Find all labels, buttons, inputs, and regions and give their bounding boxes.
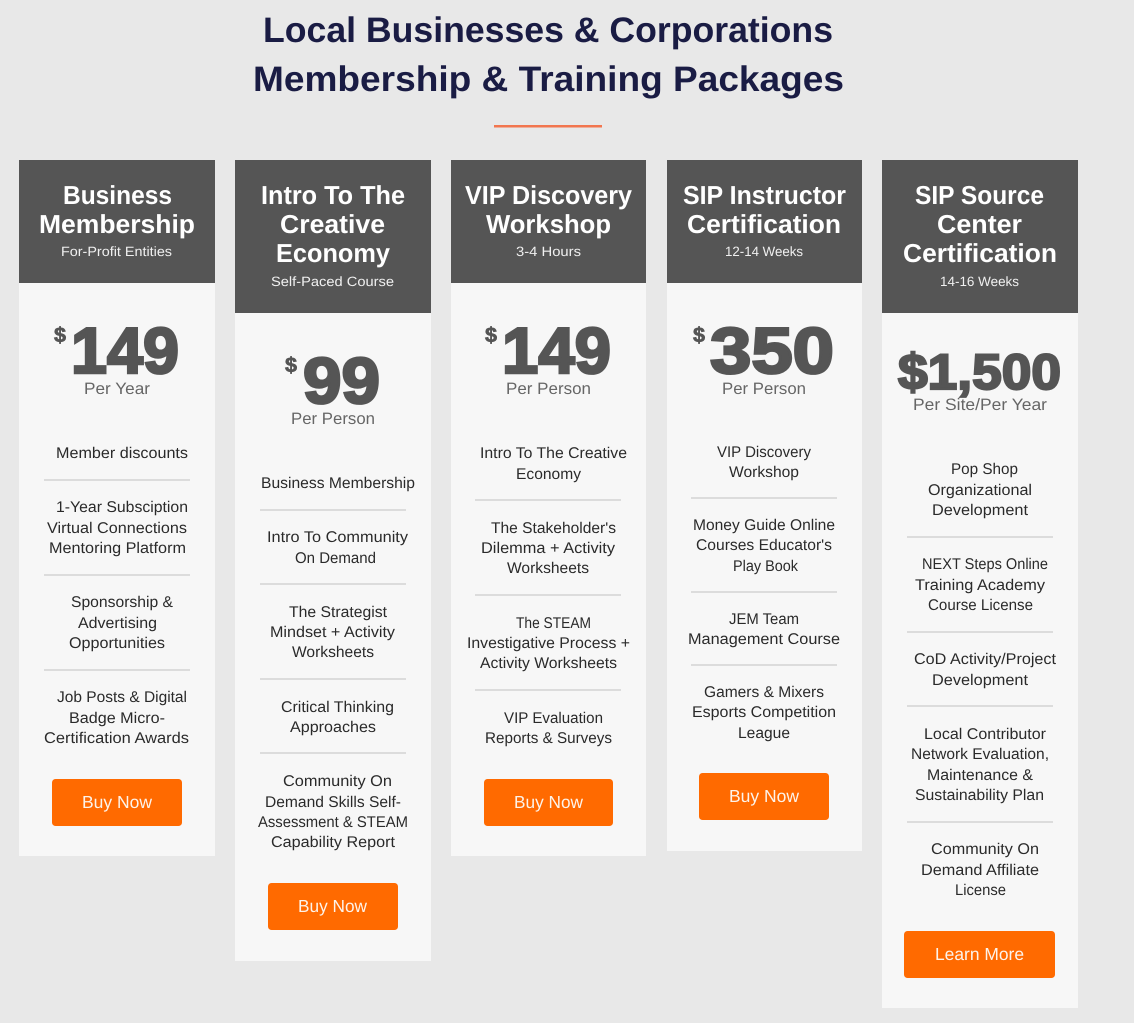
feature list: Assessment & STEAM [258,814,408,831]
feature list: Network Evaluation, [911,746,1049,763]
title: Local Businesses & Corporations [263,10,833,50]
header: VIP Discovery Workshop [451,160,646,283]
feature list: Economy [516,466,581,483]
header: SIP Source Center Certification: 14-16 Weeks [940,274,1019,289]
header: Business Membership: Membership [39,209,195,239]
price: $149 per year: Per Year [84,380,151,398]
button: Buy Now [52,779,182,826]
feature list: Worksheets [507,560,589,577]
feature list: Mindset + Activity [270,624,395,641]
feature list: Mentoring Platform [49,540,186,557]
feature list: Worksheets [292,644,374,661]
header: Intro To The Creative Economy [235,160,431,313]
feature list: Community On [283,773,392,790]
feature list: The Strategist [289,604,388,621]
feature list: Sponsorship & [71,594,174,611]
feature list [44,445,190,747]
header: Business Membership: Business [63,180,172,210]
feature list: Community On [931,841,1039,858]
feature list: Courses Educator's [696,537,832,554]
feature list: Organizational [928,482,1032,499]
header: SIP Source Center Certification [882,160,1078,313]
feature list: Business Membership [261,475,415,492]
feature list: Intro To Community [267,529,408,546]
feature list: Training Academy [915,577,1045,594]
header: SIP Source Center Certification: Center [937,209,1022,239]
feature list: NEXT Steps Online [922,556,1048,573]
feature list: Development [932,502,1029,519]
header: Intro To The Creative Economy: Self-Paced Course [271,274,394,289]
header: SIP Source Center Certification: SIP Source [915,180,1044,210]
price: $99 per person [285,344,380,428]
price: $350 per person: 350 [710,314,834,387]
header: VIP Discovery Workshop: Workshop [486,209,611,239]
feature list: Demand Affiliate [921,862,1039,879]
button: Learn More: Learn More [935,944,1024,964]
title: Membership & Training Packages [253,59,844,99]
feature list: Critical Thinking [281,699,394,716]
title [253,10,844,99]
price: $350 per person: Per Person [722,380,806,398]
feature list: Certification Awards [44,730,189,747]
feature list: 1-Year Subsciption [56,499,188,516]
feature list: Dilemma + Activity [481,540,615,557]
feature list: Badge Micro- [69,710,165,727]
button: Learn More [904,931,1055,978]
button: Buy Now: Buy Now [514,792,583,812]
feature list: Job Posts & Digital [57,689,187,706]
feature list: Management Course [688,631,840,648]
feature list: Intro To The Creative [480,445,627,462]
panel: SIP Source Center Certification [882,160,1078,1008]
feature list: JEM Team [729,611,799,628]
header: SIP Instructor Certification: SIP Instructor [683,180,846,210]
header: SIP Instructor Certification: 12-14 Weeks [725,244,803,259]
feature list: VIP Evaluation [504,710,603,727]
button: Buy Now [268,883,398,930]
feature list: Approaches [290,719,376,736]
feature list: Investigative Process + [467,635,630,652]
price: $149 per year: $ [54,324,66,347]
header: VIP Discovery Workshop: VIP Discovery [465,180,633,210]
feature list: On Demand [295,550,376,567]
feature list [258,475,415,851]
header: Intro To The Creative Economy: Creative [280,209,385,239]
feature list: League [738,725,790,742]
button: Buy Now: Buy Now [298,896,367,916]
price: $350 per person [693,314,834,398]
feature list: VIP Discovery [717,444,811,461]
header: Business Membership [19,160,215,283]
button: Buy Now: Buy Now [82,792,152,812]
panel: VIP Discovery Workshop [451,160,646,856]
feature list: License [955,882,1006,899]
header: SIP Instructor Certification [667,160,862,283]
header: Intro To The Creative Economy: Economy [276,238,391,268]
price: $149 per person: Per Person [506,380,591,398]
feature list: Virtual Connections [47,520,187,537]
feature list [467,445,630,747]
feature list: The Stakeholder's [491,520,616,537]
feature list: Course License [928,597,1033,614]
feature list: Play Book [733,558,798,575]
button: Buy Now [699,773,829,820]
feature list: Pop Shop [951,461,1018,478]
header: Business Membership: For-Profit Entities [61,244,172,259]
feature list: Gamers & Mixers [704,684,824,701]
panel: Business Membership [19,160,215,856]
feature list: Sustainability Plan [915,787,1044,804]
button: Buy Now: Buy Now [729,786,799,806]
feature list [688,444,840,742]
header: SIP Instructor Certification: Certification [687,209,841,239]
header: SIP Source Center Certification: Certification [903,238,1057,268]
price: $149 per year: 149 [71,314,179,387]
price: $350 per person: $ [693,324,705,347]
feature list: Esports Competition [692,704,836,721]
button: Buy Now [484,779,613,826]
feature list: Activity Worksheets [480,655,617,672]
panel: SIP Instructor Certification [667,160,862,851]
feature list: Workshop [729,464,799,481]
feature list: Capability Report [271,834,396,851]
feature list: Advertising [78,615,157,632]
price: $99 per person: $ [285,354,297,377]
price: $99 per person: Per Person [291,410,375,428]
feature list: Maintenance & [927,767,1034,784]
feature list: Opportunities [69,635,165,652]
feature list: Money Guide Online [693,517,835,534]
feature list: Development [932,672,1029,689]
header: Intro To The Creative Economy: Intro To The [261,180,405,210]
price: $1,500 per site per year: $1,500 [898,344,1061,400]
header: VIP Discovery Workshop: 3-4 Hours [516,244,581,259]
feature list: The STEAM [516,615,591,632]
price: $1,500 per site per year: Per Site/Per Year [913,396,1048,414]
feature list: Local Contributor [924,726,1046,743]
feature list [907,461,1057,899]
feature list: Member discounts [56,445,188,462]
price: $149 per person: $ [485,324,497,347]
panel: Intro To The Creative Economy [235,160,431,961]
feature list: Demand Skills Self- [265,794,401,811]
price: $99 per person: 99 [303,344,380,417]
price: $149 per person: 149 [502,314,611,387]
feature list: Reports & Surveys [485,730,612,747]
feature list: CoD Activity/Project [914,651,1057,668]
